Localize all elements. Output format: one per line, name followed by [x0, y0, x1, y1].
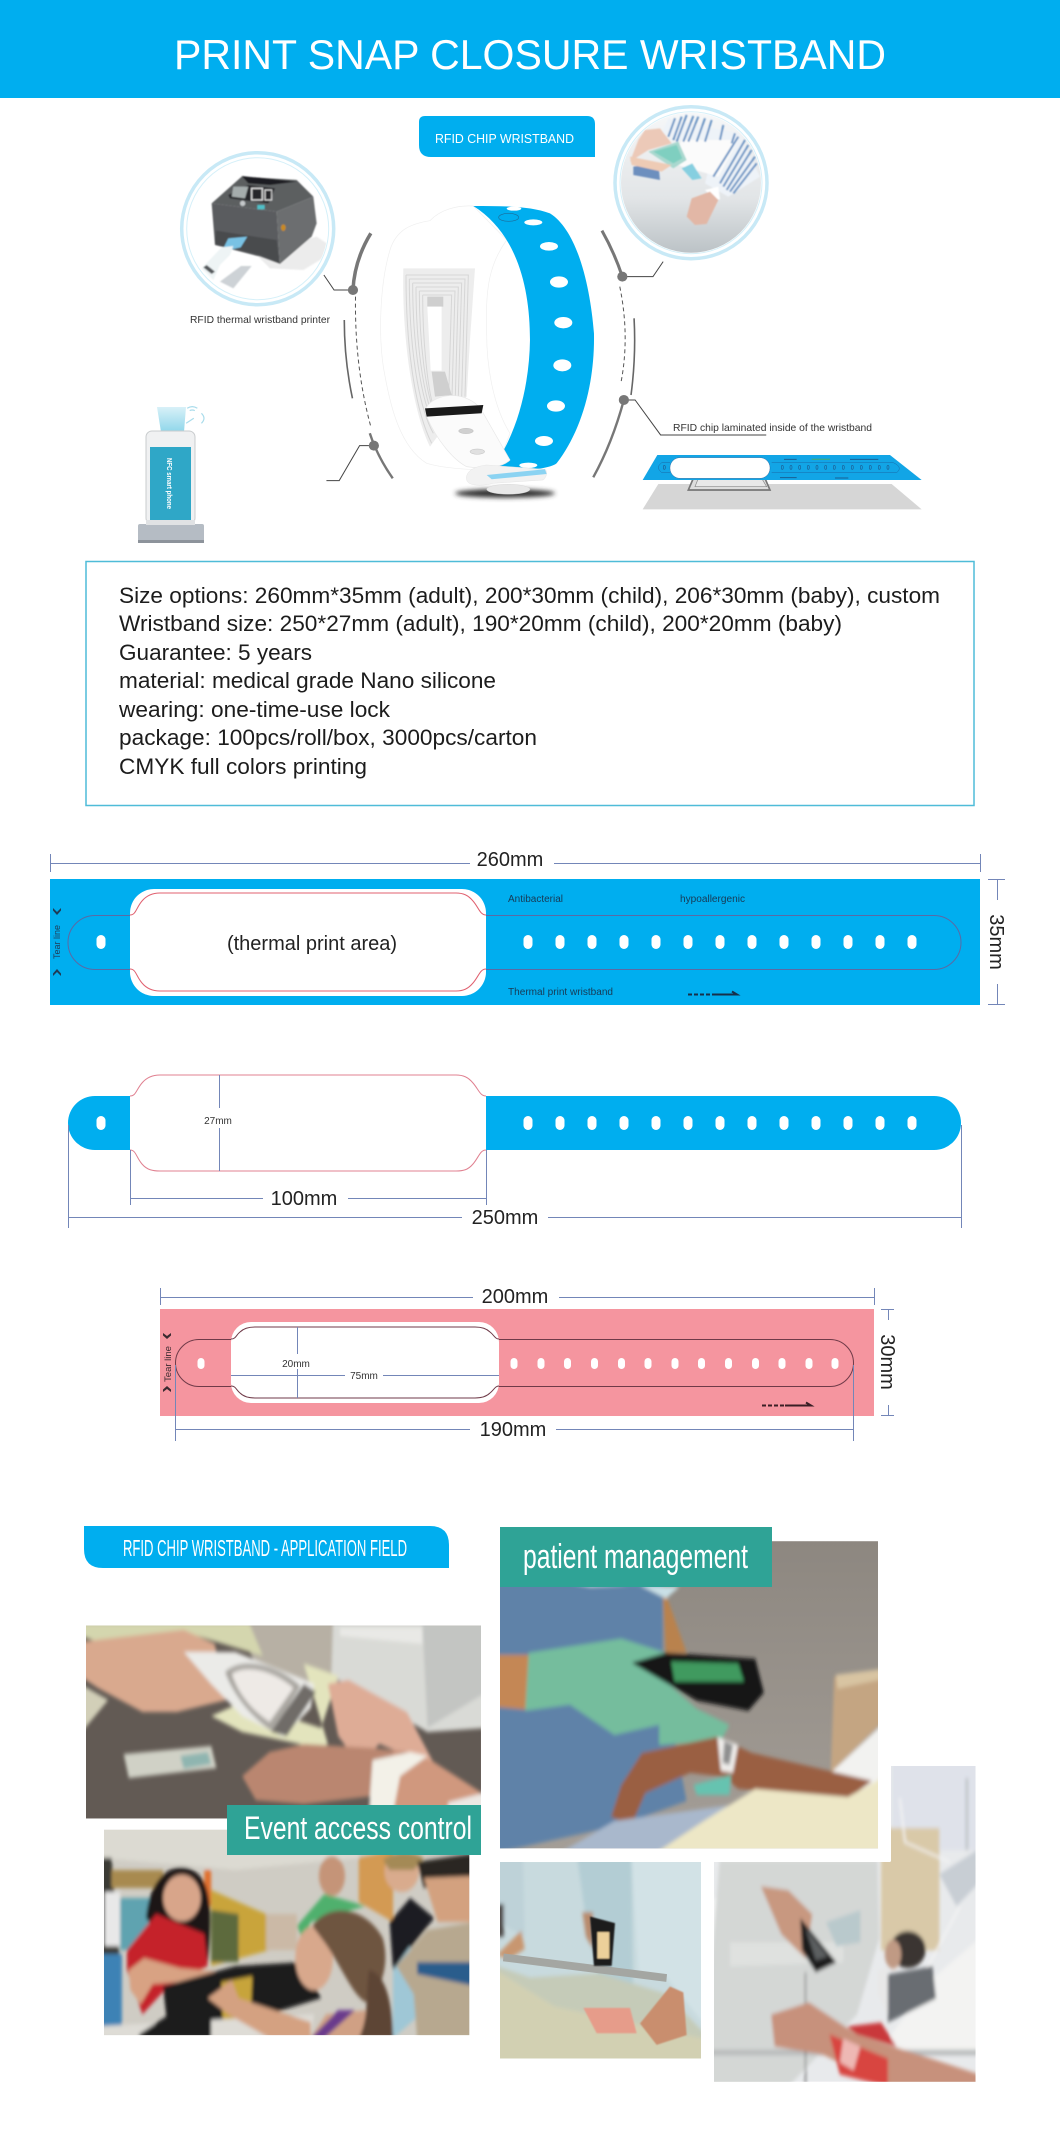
- photo: event wristband checkout: [99, 1827, 475, 2038]
- strap holes: [96, 935, 916, 949]
- dimension: 260mm: 260mm: [477, 849, 543, 871]
- spec list: material: medical grade Nano silicone: [119, 668, 496, 693]
- heading: application field: RFID CHIP WRISTBAND - APPLICATION FIELD: [123, 1535, 407, 1561]
- icon: NFC smart phone: [138, 407, 204, 543]
- signal waves: [186, 407, 204, 423]
- spec list: Guarantee: 5 years: [119, 640, 312, 665]
- dimension: 100mm: 100mm: [271, 1188, 337, 1210]
- icon: thermal printer in circle: [182, 153, 337, 305]
- spec list: CMYK full colors printing: [119, 754, 367, 779]
- dimension: 200mm: [160, 1286, 874, 1308]
- thermal print area: [130, 889, 486, 996]
- panel: specifications: [86, 562, 974, 806]
- wristband layout: adult print sheet: (thermal print area): [227, 933, 397, 955]
- dimension: 190mm: [175, 1365, 854, 1441]
- phone body: [146, 431, 195, 524]
- dimension: 35mm: 35mm: [985, 914, 1007, 970]
- direction arrow: [688, 992, 737, 994]
- badge: RFID chip wristband: [419, 116, 595, 157]
- bracket: right side arcs and leaders: [593, 231, 766, 477]
- photo label: event access control: Event access control: [244, 1810, 472, 1846]
- dimension: 35mm: [985, 880, 1007, 1004]
- photo label: patient management: [500, 1527, 772, 1587]
- band printed text: Thermal print wristband: [508, 987, 613, 998]
- dimension: 27mm: [204, 1075, 232, 1171]
- spec list: wearing: one-time-use lock: [118, 697, 391, 722]
- label: RFID chip laminated: RFID chip laminated inside of the wristband: [673, 422, 872, 434]
- dimension: 260mm: [50, 849, 980, 872]
- wristband layout: adult die-cut: [68, 1075, 961, 1171]
- spec list: [118, 583, 940, 779]
- dimension: 75mm: 75mm: [350, 1371, 378, 1382]
- dimension: 20mm: 20mm: [282, 1359, 310, 1370]
- spec list: Size options: 260mm*35mm (adult), 200*30mm (child), 206*30mm (baby), custom: [119, 583, 940, 608]
- tear line: Tear line: [52, 925, 62, 959]
- photo: doctor scanning with red laser: [710, 1761, 980, 2087]
- dimension: 250mm: 250mm: [472, 1207, 538, 1229]
- strap holes: [507, 207, 572, 468]
- header banner: [0, 0, 1060, 98]
- spec list: package: 100pcs/roll/box, 3000pcs/carton: [119, 725, 537, 750]
- title: PRINT SNAP CLOSURE WRISTBAND: [174, 31, 886, 78]
- tear line: [163, 1333, 174, 1392]
- photo: nurse scanning patient wristband: [494, 1541, 884, 1853]
- dimension: 30mm: [876, 1310, 898, 1416]
- strap outline: [176, 1340, 854, 1386]
- dimension: 30mm: 30mm: [876, 1334, 898, 1390]
- white border around nurse photo: [500, 1541, 891, 1861]
- dimension: 20mm: [282, 1327, 310, 1398]
- strap holes: [96, 1116, 916, 1130]
- diagram: laminated chip layers: [643, 455, 922, 509]
- shadow: [455, 489, 555, 498]
- dock: [138, 524, 204, 543]
- strap holes: [198, 1358, 838, 1369]
- heading: application field: [84, 1526, 449, 1568]
- wristband illustration: [381, 206, 594, 498]
- spec list: Wristband size: 250*27mm (adult), 190*20mm (child), 200*20mm (baby): [119, 611, 842, 636]
- dimension: 200mm: 200mm: [482, 1286, 548, 1308]
- scan beam: [157, 407, 186, 432]
- dimension: 190mm: 190mm: [480, 1419, 546, 1441]
- white back: [381, 206, 510, 470]
- tear line: Tear line: [163, 1346, 174, 1382]
- antenna: [403, 268, 475, 447]
- dimension: 27mm: 27mm: [204, 1116, 232, 1127]
- bracket: left side arcs and leaders: [324, 233, 393, 481]
- print window: [231, 1322, 499, 1403]
- label: printer: RFID thermal wristband printer: [190, 314, 330, 326]
- photo: barcode scanner over wristband: [80, 1623, 487, 1821]
- closure tab: [425, 396, 547, 494]
- band printed text: [508, 894, 745, 998]
- photo: handheld reader at bedside: [495, 1857, 706, 2063]
- direction arrow: [762, 1402, 811, 1406]
- wristband layout: adult print sheet: [50, 879, 980, 1005]
- dimension: 100mm: [130, 1150, 486, 1210]
- band printed text: Antibacterial: [508, 894, 563, 905]
- wristband layout: child pink sheet: [160, 1309, 874, 1416]
- die-cut outline: [130, 1075, 486, 1171]
- icon: NFC smart phone: NFC smart phone: [165, 458, 172, 509]
- tear line: [52, 908, 62, 976]
- blue strap: [473, 206, 594, 475]
- badge: RFID chip wristband: RFID CHIP WRISTBAND: [435, 131, 574, 146]
- photo label: event access control: [227, 1805, 481, 1855]
- dimension: 250mm: [68, 1125, 962, 1229]
- strap outline: [68, 916, 961, 970]
- photo label: patient management: patient management: [523, 1538, 748, 1576]
- band printed text: hypoallergenic: [680, 894, 745, 905]
